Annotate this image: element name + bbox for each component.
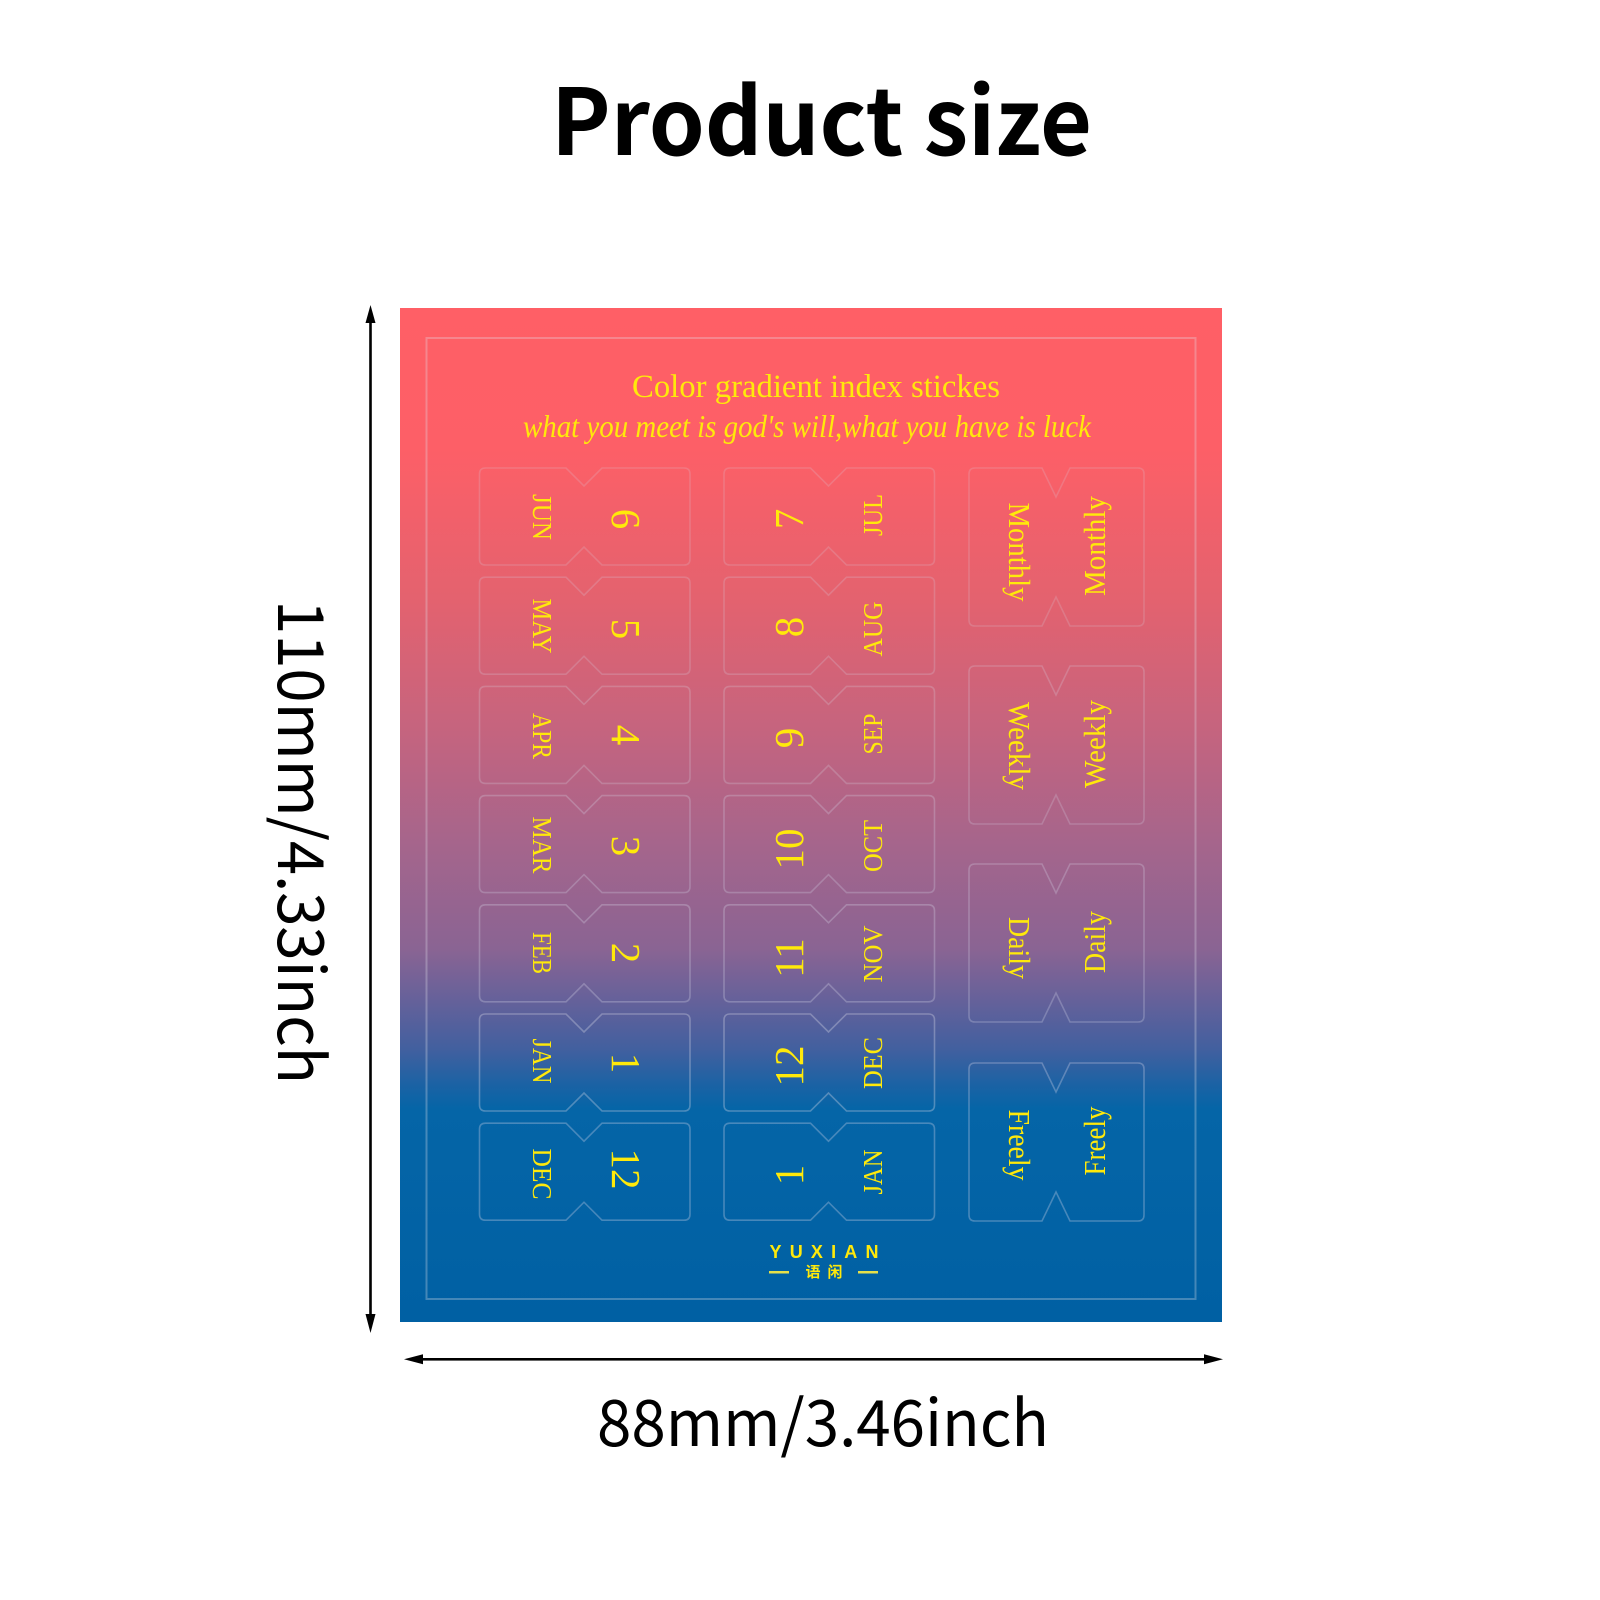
- tab: Freely: Freely: [1002, 1110, 1037, 1181]
- tab: 12 DEC: 12: [766, 1046, 812, 1086]
- tab: DEC 12: [480, 1123, 690, 1220]
- brand logo: 语闲: [806, 1263, 842, 1281]
- tab: JUN 6: 6: [603, 509, 649, 529]
- tab: Daily: Daily: [1002, 917, 1037, 979]
- tab: FEB 2: 2: [603, 943, 649, 963]
- tab: APR 4: [480, 686, 690, 783]
- tab: 9 SEP: 9: [766, 728, 812, 748]
- tab: 7 JUL: 7: [766, 509, 812, 529]
- label: width: 88mm/3.46inch: [597, 1373, 1049, 1465]
- tab: 8 AUG: AUG: [858, 602, 888, 656]
- tab: 8 AUG: [724, 577, 934, 674]
- tab: JAN 1: JAN: [527, 1038, 557, 1084]
- tab: MAY 5: MAY: [527, 598, 557, 654]
- tab: 9 SEP: SEP: [858, 714, 888, 754]
- tab: Freely: [969, 1063, 1144, 1221]
- tab: MAR 3: [480, 796, 690, 893]
- tab: 8 AUG: 8: [766, 617, 812, 637]
- label: height: 110mm/4.33inch: [259, 600, 351, 1084]
- brand logo: [769, 1242, 878, 1281]
- tab: Monthly: [969, 468, 1144, 626]
- tab: FEB 2: [480, 905, 690, 1002]
- tab: 12 DEC: [724, 1014, 934, 1111]
- tab: DEC 12: DEC: [527, 1148, 557, 1200]
- tab: DEC 12: 12: [603, 1148, 649, 1190]
- arrow: height dimension: [366, 305, 376, 1333]
- tab: 10 OCT: OCT: [858, 820, 888, 872]
- tab: 12 DEC: DEC: [858, 1037, 888, 1089]
- tab: JAN 1: 1: [603, 1053, 649, 1073]
- tab: MAY 5: 5: [603, 619, 649, 639]
- tab: Weekly: Weekly: [1002, 702, 1037, 790]
- tab: APR 4: APR: [527, 713, 557, 759]
- title: Product size: [551, 49, 1092, 182]
- tab: 1 JAN: 1: [766, 1165, 812, 1185]
- sheet tagline: what you meet is god's will,what you have is luck: [523, 408, 1092, 444]
- tab: Daily: Daily: [1077, 911, 1112, 973]
- tab: MAR 3: MAR: [527, 816, 557, 874]
- tab: Weekly: Weekly: [1077, 700, 1112, 788]
- panel: sticker sheet: [400, 308, 1222, 1322]
- arrow: width dimension: [404, 1354, 1223, 1364]
- tab: JAN 1: [480, 1014, 690, 1111]
- sheet heading: Color gradient index stickes: [632, 369, 1000, 405]
- tab: 11 NOV: 11: [766, 938, 812, 978]
- tab: Weekly: [969, 666, 1144, 824]
- tab: MAR 3: 3: [603, 836, 649, 856]
- tab: Monthly: Monthly: [1077, 496, 1112, 596]
- tab: 9 SEP: [724, 686, 934, 783]
- tab: JUN 6: [480, 468, 690, 565]
- tab: 10 OCT: 10: [766, 828, 812, 870]
- tab: 11 NOV: [724, 905, 934, 1002]
- tab: Freely: Freely: [1077, 1106, 1112, 1176]
- tab: Monthly: Monthly: [1002, 502, 1037, 602]
- tab: Daily: [969, 864, 1144, 1022]
- tab: 7 JUL: [724, 468, 934, 565]
- tab: JUN 6: JUN: [527, 494, 557, 540]
- tab: 10 OCT: [724, 796, 934, 893]
- tab: FEB 2: FEB: [527, 932, 557, 974]
- tab: 7 JUL: JUL: [858, 494, 888, 536]
- tab: MAY 5: [480, 577, 690, 674]
- tab: 1 JAN: [724, 1123, 934, 1220]
- tab: 1 JAN: JAN: [858, 1150, 888, 1194]
- tab: 11 NOV: NOV: [858, 925, 888, 982]
- tab: APR 4: 4: [603, 725, 649, 745]
- brand logo: YUXIAN: [770, 1242, 878, 1262]
